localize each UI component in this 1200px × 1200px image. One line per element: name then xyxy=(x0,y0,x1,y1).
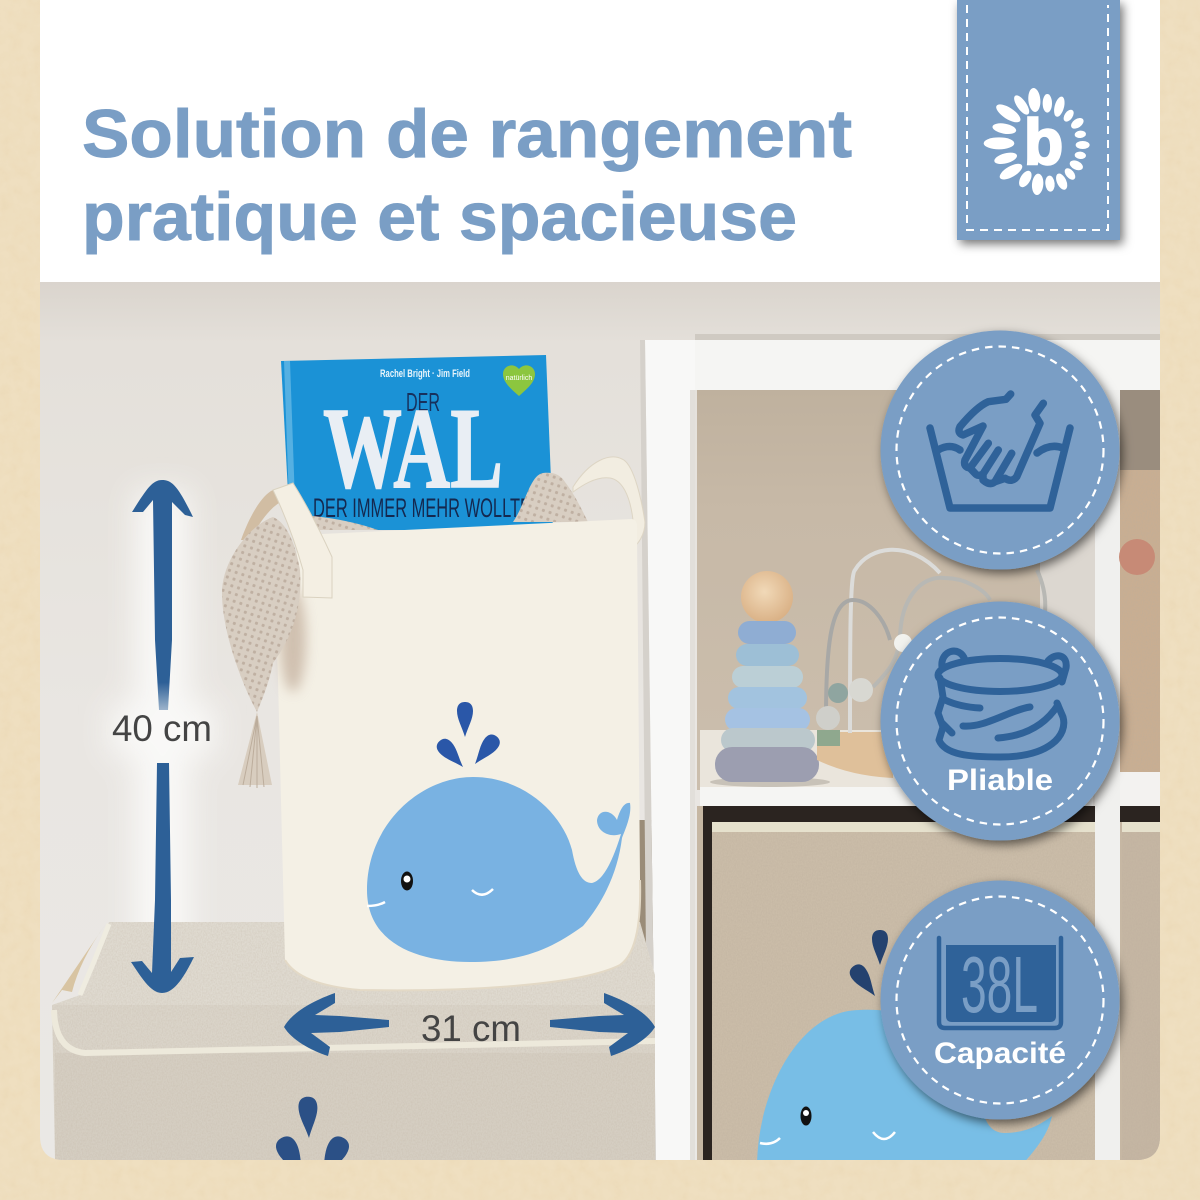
canvas basket xyxy=(222,457,645,990)
icon: 38 litre container xyxy=(939,938,1061,1029)
icon: 38 litre container: 38L xyxy=(961,940,1038,1029)
badge: washable xyxy=(880,330,1120,570)
height arrow up xyxy=(132,480,193,710)
basket straps xyxy=(241,483,332,598)
width arrow right xyxy=(550,993,655,1056)
cloth shadow on basket xyxy=(280,588,306,692)
badge: capacity xyxy=(880,880,1120,1120)
wooden stacking toy xyxy=(710,571,830,787)
wall xyxy=(40,282,1160,1160)
brand tag xyxy=(957,0,1120,240)
muslin cloth in basket xyxy=(300,473,588,530)
width label: 31 cm xyxy=(421,1008,521,1049)
book: WAL xyxy=(323,385,503,513)
right linen box xyxy=(1122,822,1160,1160)
badge label: Capacité xyxy=(934,1037,1066,1070)
linen box under basket xyxy=(52,922,655,1183)
height label: 40 cm xyxy=(112,708,212,749)
water spout xyxy=(436,702,500,767)
width arrow left xyxy=(284,993,389,1056)
book xyxy=(281,355,553,530)
badge: foldable xyxy=(880,602,1120,840)
linen storage box with whale xyxy=(712,822,1095,1165)
book: DER IMMER MEHR WOLLTE xyxy=(313,493,531,523)
title: Solution de rangement xyxy=(82,96,852,172)
badge label: Pliable xyxy=(947,764,1053,797)
arrow glow xyxy=(110,490,215,990)
book: natürlich xyxy=(506,375,532,382)
water drops xyxy=(850,930,888,996)
lifestyle photo xyxy=(40,282,1160,1183)
brand logo xyxy=(984,88,1090,195)
white header band xyxy=(40,0,1160,283)
book: DER xyxy=(406,387,440,417)
woven basket and pom-pom xyxy=(1119,470,1160,772)
icon: hand washing xyxy=(930,394,1070,508)
bead maze toy xyxy=(816,550,1045,778)
whale appliqué xyxy=(367,702,630,962)
icon: collapsed basket xyxy=(938,651,1066,757)
whale appliqué xyxy=(757,1010,1052,1165)
height arrow down xyxy=(131,763,194,993)
muslin cloth xyxy=(222,517,300,788)
title xyxy=(82,96,852,255)
title: pratique et spacieuse xyxy=(82,179,797,255)
brand logo: b xyxy=(1024,106,1063,178)
white shelf unit xyxy=(636,334,1160,1160)
book: Rachel Bright · Jim Field xyxy=(380,368,470,380)
water drops xyxy=(276,1096,349,1160)
